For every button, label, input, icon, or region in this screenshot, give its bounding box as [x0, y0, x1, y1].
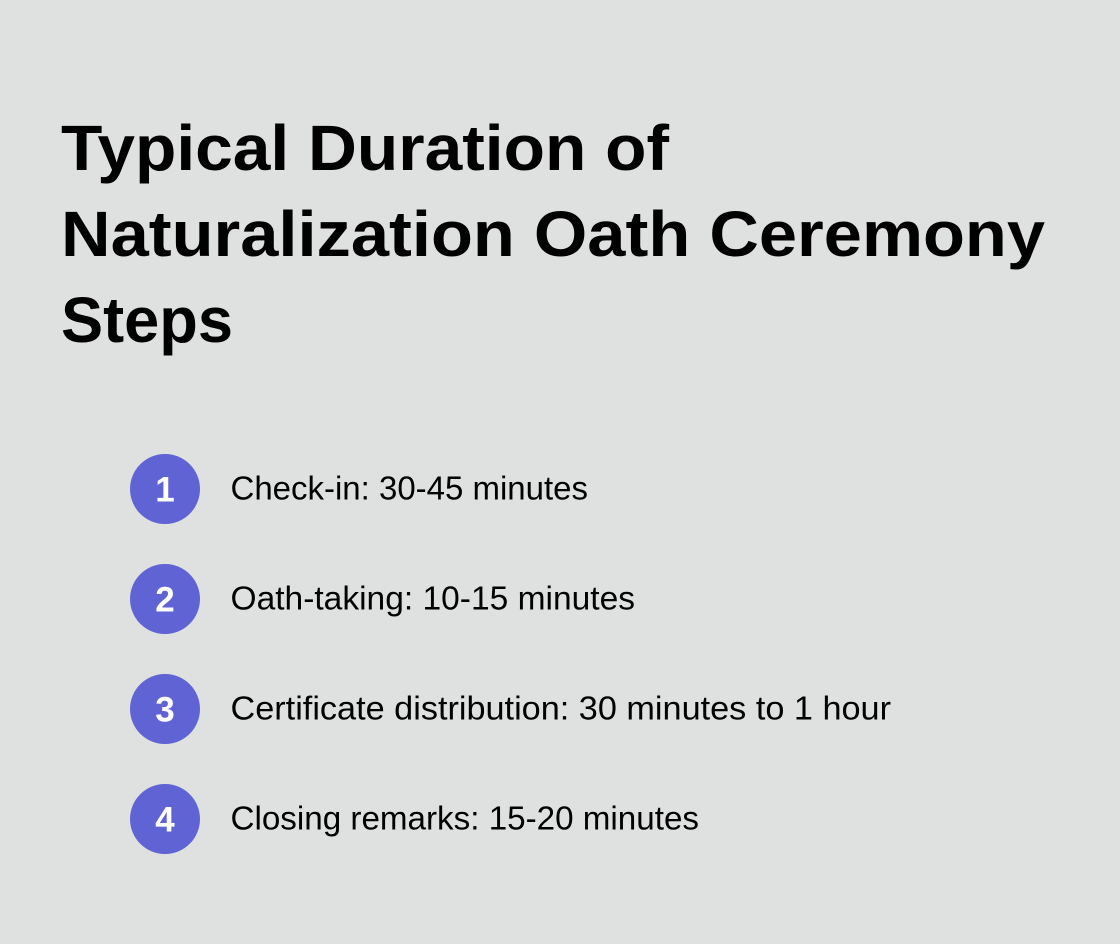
title: Naturalization Oath Ceremony — [61, 198, 1045, 270]
step 3: certificate distribution — [130, 674, 891, 744]
step list — [130, 454, 891, 854]
step 1: check-in: 1 — [155, 470, 175, 510]
step 4: closing remarks: Closing remarks: 15-20 minutes — [230, 800, 699, 836]
title: Steps — [61, 284, 233, 356]
step 4: closing remarks: 4 — [155, 800, 175, 840]
title: Typical Duration of — [61, 112, 670, 184]
step 2: oath-taking: 2 — [155, 580, 175, 620]
step 4: closing remarks — [130, 784, 699, 854]
step 2: oath-taking — [130, 564, 635, 634]
step 3: certificate distribution: 3 — [155, 690, 175, 730]
title — [61, 112, 1045, 356]
step 1: check-in — [130, 454, 588, 524]
step 1: check-in: Check-in: 30-45 minutes — [230, 470, 588, 506]
step 3: certificate distribution: Certificate distribution: 30 minutes to 1 hour — [230, 690, 891, 726]
step 2: oath-taking: Oath-taking: 10-15 minutes — [230, 580, 635, 616]
